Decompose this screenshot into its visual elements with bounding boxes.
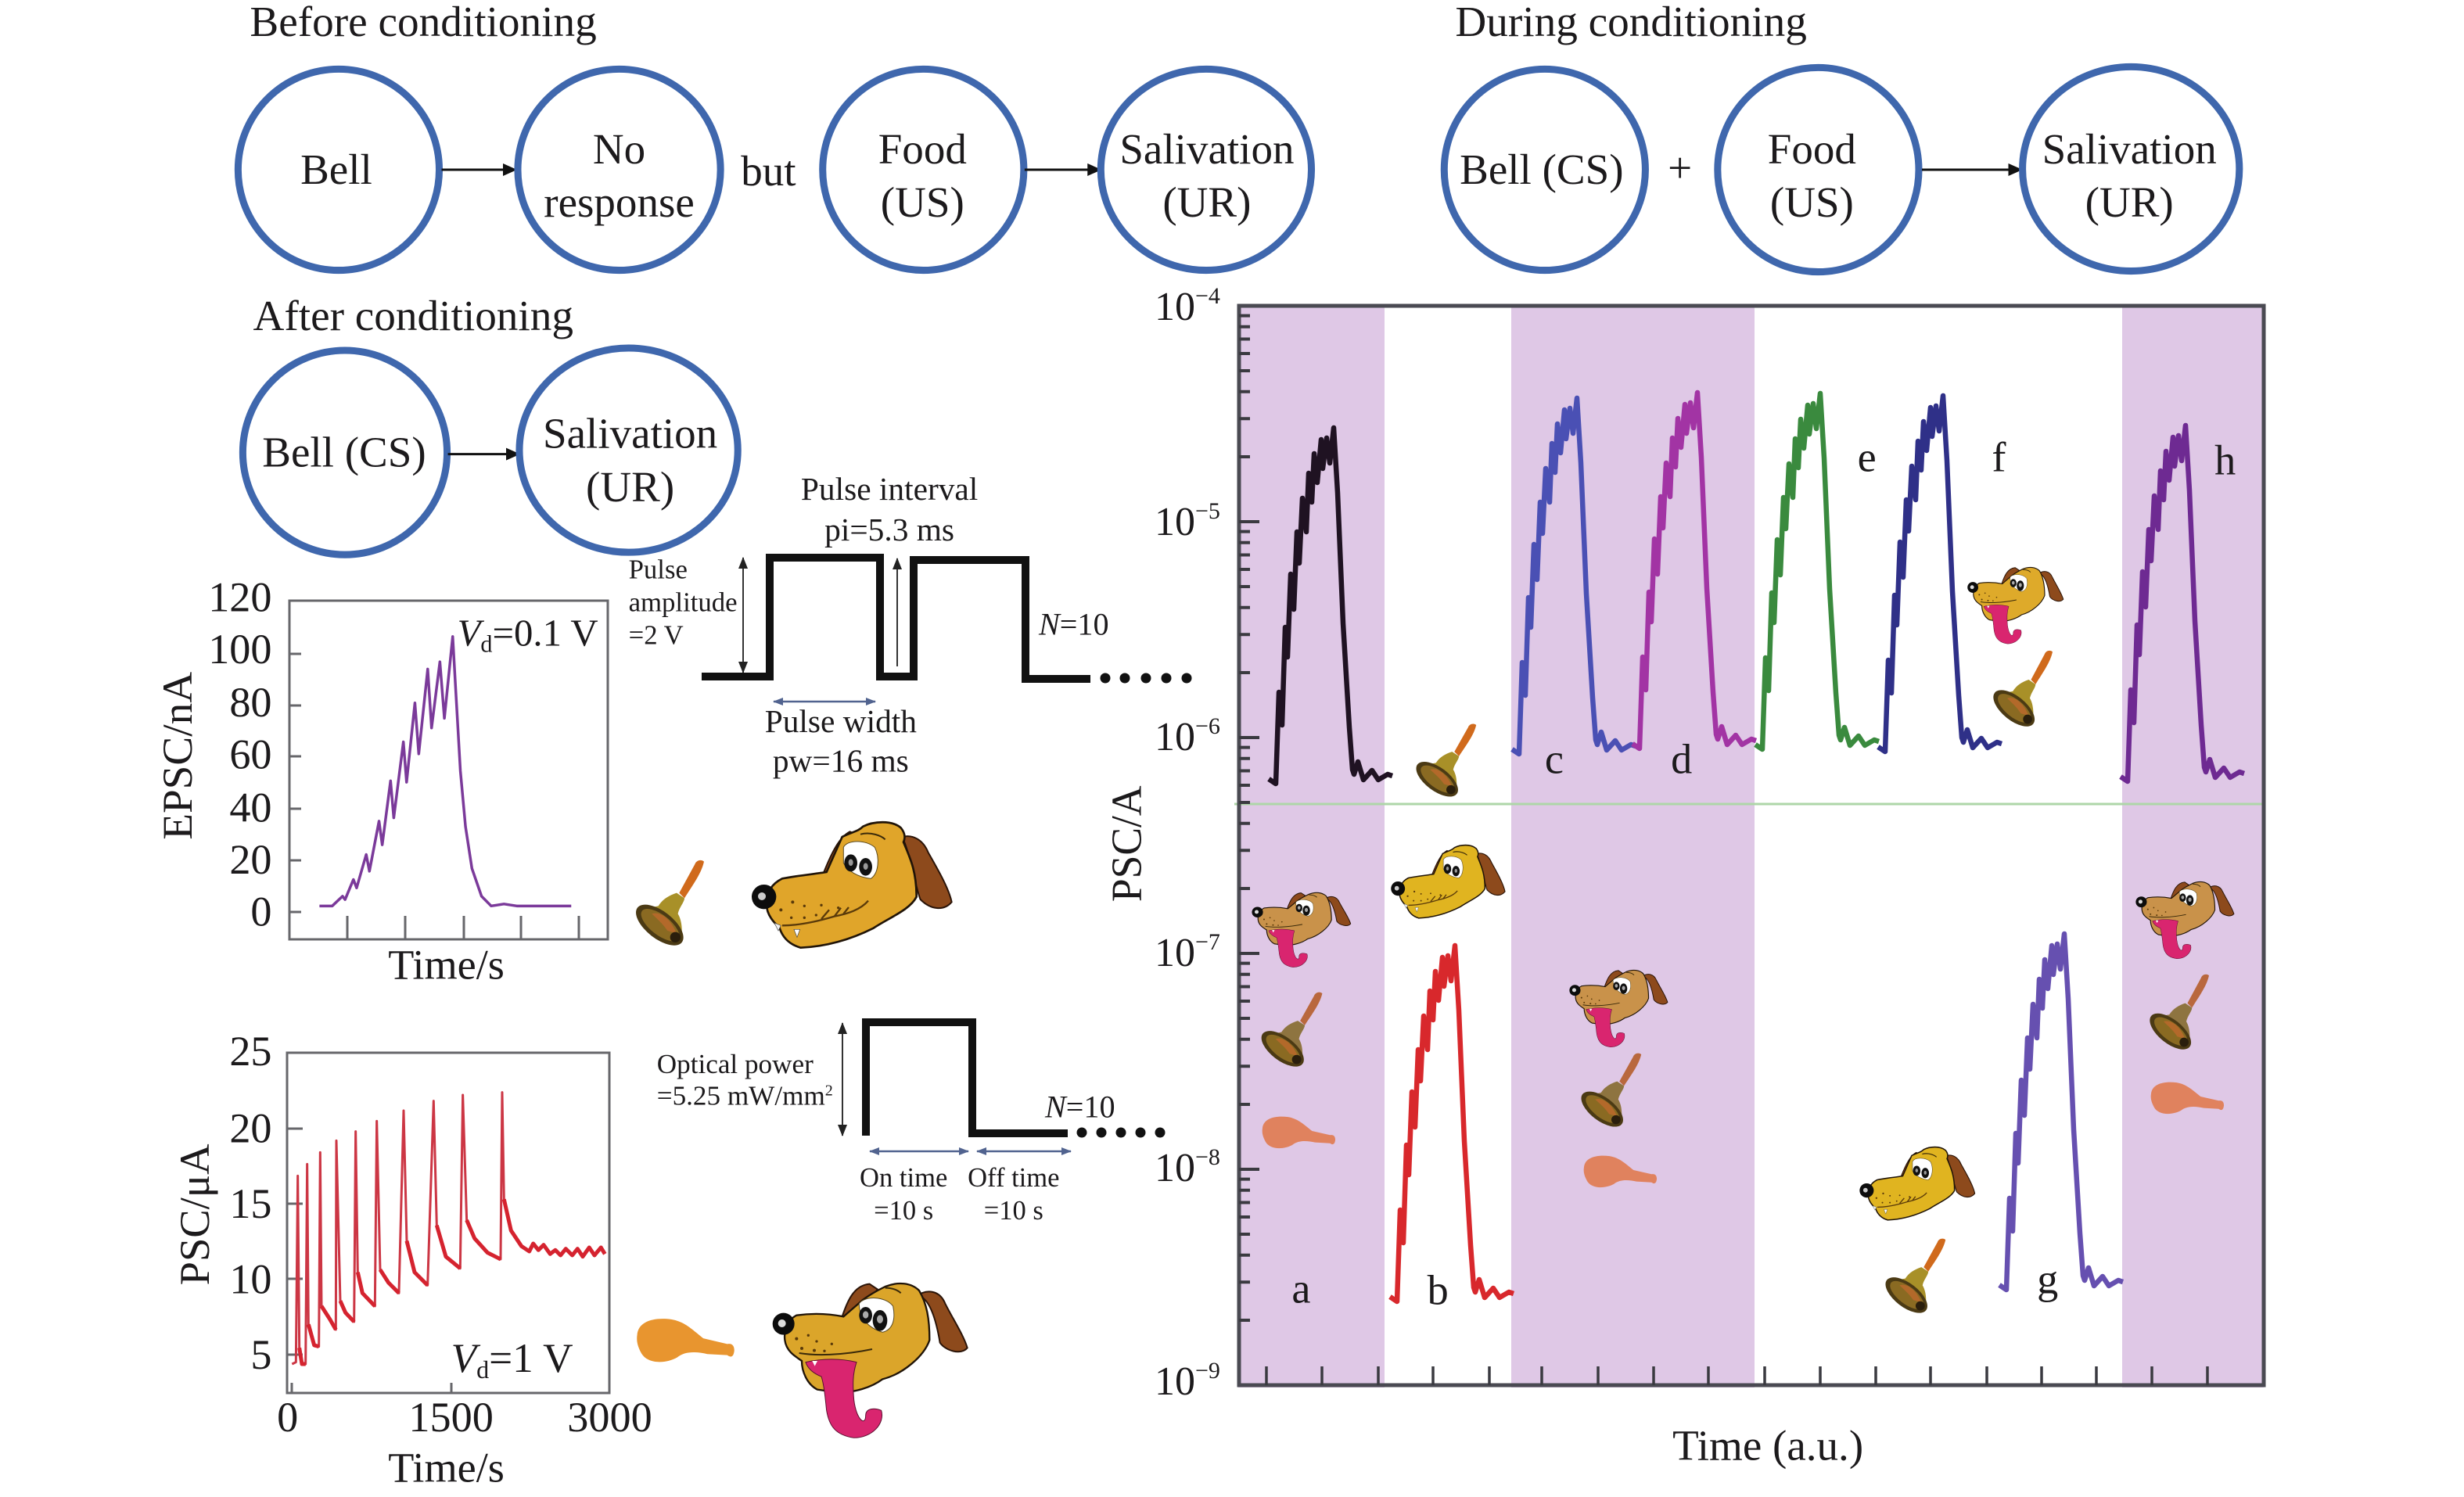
arrow: bell to no response — [442, 169, 515, 171]
y axis decade labels — [1155, 283, 1220, 1404]
axis titles: Time (a.u.) — [1672, 1421, 1863, 1469]
icon: dog above curve b — [1391, 845, 1505, 918]
axis titles: PSC/A — [1103, 785, 1151, 902]
curve: PSC red trace — [292, 1093, 605, 1364]
optical pulse labels: On time — [860, 1163, 947, 1193]
curve letters: d — [1671, 735, 1692, 782]
curve b: red trace — [1390, 946, 1514, 1301]
axis labels: d — [480, 631, 492, 658]
y axis decade labels: −4 — [1195, 283, 1220, 309]
flow: during conditioning, bell plus food gives salivation — [1444, 66, 2240, 272]
curve c: blue trace — [1512, 398, 1636, 754]
flow: after conditioning, bell gives salivation — [242, 348, 738, 555]
optical pulse labels: =10 s — [874, 1196, 933, 1226]
node: Salivation (UR): (UR) — [2085, 178, 2174, 226]
node: Food (US) — [1718, 67, 1919, 272]
axis labels: =0.1 V — [492, 612, 598, 655]
axis labels: 3000 — [567, 1394, 652, 1441]
curve h: purple trace — [2121, 425, 2244, 781]
node: No response: No — [593, 125, 645, 173]
y axis decade labels: 10 — [1155, 1359, 1195, 1404]
axis labels: 120 — [208, 574, 272, 621]
icon: large food — [637, 1319, 735, 1362]
threshold line — [1234, 802, 2264, 806]
pulse labels: amplitude — [629, 587, 738, 618]
axis labels: Time/s — [388, 942, 505, 989]
node: Food (US): Food — [1768, 125, 1856, 173]
curve d: magenta trace — [1632, 393, 1756, 748]
node: Salivation (UR): Salivation — [2042, 125, 2217, 173]
optical pulse labels: N=10 — [1044, 1089, 1115, 1124]
axis labels: 1500 — [408, 1394, 494, 1441]
arrow: bell to salivation — [448, 454, 519, 455]
curve: EPSC purple trace — [319, 637, 571, 906]
arrow: food to salivation — [1025, 169, 1100, 171]
axis labels: d — [476, 1355, 489, 1384]
axis labels: EPSC/nA — [154, 672, 201, 840]
chart frame and ticks — [289, 601, 608, 939]
arrows: power, on time, off time — [842, 1023, 843, 1136]
flow: before conditioning, bell gives no response but food gives salivation — [238, 69, 1312, 271]
node: Bell (CS) — [242, 350, 447, 555]
icons: after curve f, salivating dog and bell — [1967, 567, 2064, 733]
node: Salivation (UR) — [2023, 66, 2240, 271]
connector text: but: but — [741, 147, 796, 195]
icons: band c-d, salivating dog, bell, food — [1569, 970, 1668, 1187]
y axis decade labels: −5 — [1195, 498, 1220, 524]
optical pulse labels: Off time — [968, 1163, 1059, 1193]
axis labels — [171, 1028, 652, 1491]
y axis decade labels: −9 — [1195, 1358, 1220, 1384]
axis labels: 100 — [208, 626, 272, 673]
axis labels: 80 — [229, 679, 272, 726]
pulse labels: Pulse interval — [801, 471, 978, 507]
curve letters: f — [1992, 434, 2006, 481]
plus sign: + — [1668, 144, 1692, 192]
chart frame and ticks — [287, 1053, 609, 1393]
curve e: green trace — [1755, 393, 1879, 749]
y axis decade labels: −6 — [1195, 713, 1220, 739]
icons: band h, salivating dog, bell, food — [2135, 881, 2234, 1114]
heading: After conditioning: After conditioning — [253, 292, 573, 339]
optical pulse labels: 2 — [825, 1082, 833, 1099]
node: Salivation (UR) — [519, 348, 738, 552]
chart: main PSC log plot — [1103, 283, 2264, 1469]
curve letters: a — [1291, 1265, 1310, 1312]
curve f: navy trace — [1878, 396, 2002, 752]
axis labels: 20 — [229, 1105, 272, 1152]
axis labels: 5 — [250, 1331, 272, 1378]
axis labels: Time/s — [388, 1444, 505, 1491]
y axis decade labels: 10 — [1155, 285, 1195, 329]
node: Bell (CS): Bell (CS) — [262, 429, 426, 476]
node: Food (US) — [823, 69, 1024, 271]
diagram: electrical pulse train — [629, 471, 1192, 778]
curve a: black trace — [1269, 428, 1392, 784]
y axis decade labels: 10 — [1155, 500, 1195, 544]
pulse labels: Pulse width — [765, 703, 917, 739]
y axis decade labels: 10 — [1155, 931, 1195, 975]
axis labels — [154, 574, 598, 989]
node: Salivation (UR): Salivation — [543, 410, 717, 458]
optical pulse labels — [657, 1049, 1115, 1226]
icons: band a, salivating dog, bell, food — [1252, 892, 1351, 1148]
icons: bell only — [1410, 723, 1476, 803]
axis labels: V — [458, 612, 485, 655]
node: Bell — [238, 69, 440, 271]
curve letters: c — [1545, 735, 1564, 782]
arrow: food to salivation — [1922, 169, 2021, 171]
axis labels: 40 — [229, 784, 272, 831]
chart: PSC versus time — [171, 1028, 652, 1491]
pulse labels: Pulse — [629, 554, 688, 584]
axis labels: V — [451, 1335, 481, 1381]
icon: large bell — [629, 860, 704, 953]
curve letters: h — [2214, 437, 2236, 484]
node: Salivation (UR): (UR) — [586, 463, 674, 511]
chart: EPSC versus time — [154, 574, 608, 989]
y axis decade labels: 10 — [1155, 715, 1195, 759]
node: Salivation (UR): Salivation — [1119, 125, 1294, 173]
dots — [1100, 673, 1192, 684]
pulse labels — [629, 471, 1109, 778]
axis titles — [1103, 785, 1863, 1469]
y axis decade labels: −8 — [1195, 1144, 1220, 1170]
pulse labels: =2 V — [629, 620, 684, 651]
pulse labels: N=10 — [1038, 607, 1109, 642]
shaded stimulus bands — [1238, 306, 2264, 1388]
node: Bell (CS) — [1444, 69, 1645, 271]
pulse labels: pw=16 ms — [773, 742, 909, 778]
curve letters — [1291, 434, 2236, 1313]
pulse labels: pi=5.3 ms — [824, 512, 954, 547]
node: Food (US): (US) — [1770, 178, 1854, 226]
axis labels: 0 — [250, 888, 272, 935]
axis labels: 60 — [229, 731, 272, 777]
node: No response — [518, 69, 720, 271]
node: Food (US): Food — [878, 125, 967, 173]
arrows: amplitude, interval, width — [742, 558, 744, 673]
y axis decade labels: −7 — [1195, 929, 1220, 955]
axis labels: 25 — [229, 1028, 272, 1075]
node: Salivation (UR): (UR) — [1162, 178, 1251, 226]
curve g: violet trace — [1999, 934, 2123, 1290]
diagram: optical pulse train — [657, 1022, 1166, 1226]
axis labels: =1 V — [489, 1335, 573, 1381]
axis labels: 10 — [229, 1255, 272, 1302]
axis labels: 20 — [229, 836, 272, 883]
icons: before curve g, dog and bell — [1859, 1147, 1975, 1319]
icon: large dog salivating — [773, 1283, 968, 1438]
optical pulse labels: =10 s — [984, 1196, 1043, 1226]
node: No response: response — [544, 178, 695, 226]
node: Food (US): (US) — [881, 178, 964, 226]
node: Salivation (UR) — [1101, 69, 1312, 271]
dots — [1076, 1128, 1166, 1137]
plot frame and ticks — [1239, 306, 2264, 1385]
curve letters: g — [2037, 1255, 2058, 1302]
axis labels: 0 — [277, 1394, 298, 1441]
icon: large dog with no salivation — [752, 822, 952, 948]
optical pulse labels: Optical power — [657, 1049, 814, 1079]
y axis decade labels: 10 — [1155, 1146, 1195, 1190]
optical pulse labels: =5.25 mW/mm — [657, 1080, 825, 1111]
node: Bell: Bell — [300, 145, 372, 193]
node: Bell (CS): Bell (CS) — [1460, 145, 1624, 193]
curve letters: e — [1858, 434, 1877, 481]
axis labels: PSC/μA — [171, 1144, 218, 1285]
curve letters: b — [1428, 1266, 1449, 1313]
axis labels: 15 — [229, 1180, 272, 1227]
